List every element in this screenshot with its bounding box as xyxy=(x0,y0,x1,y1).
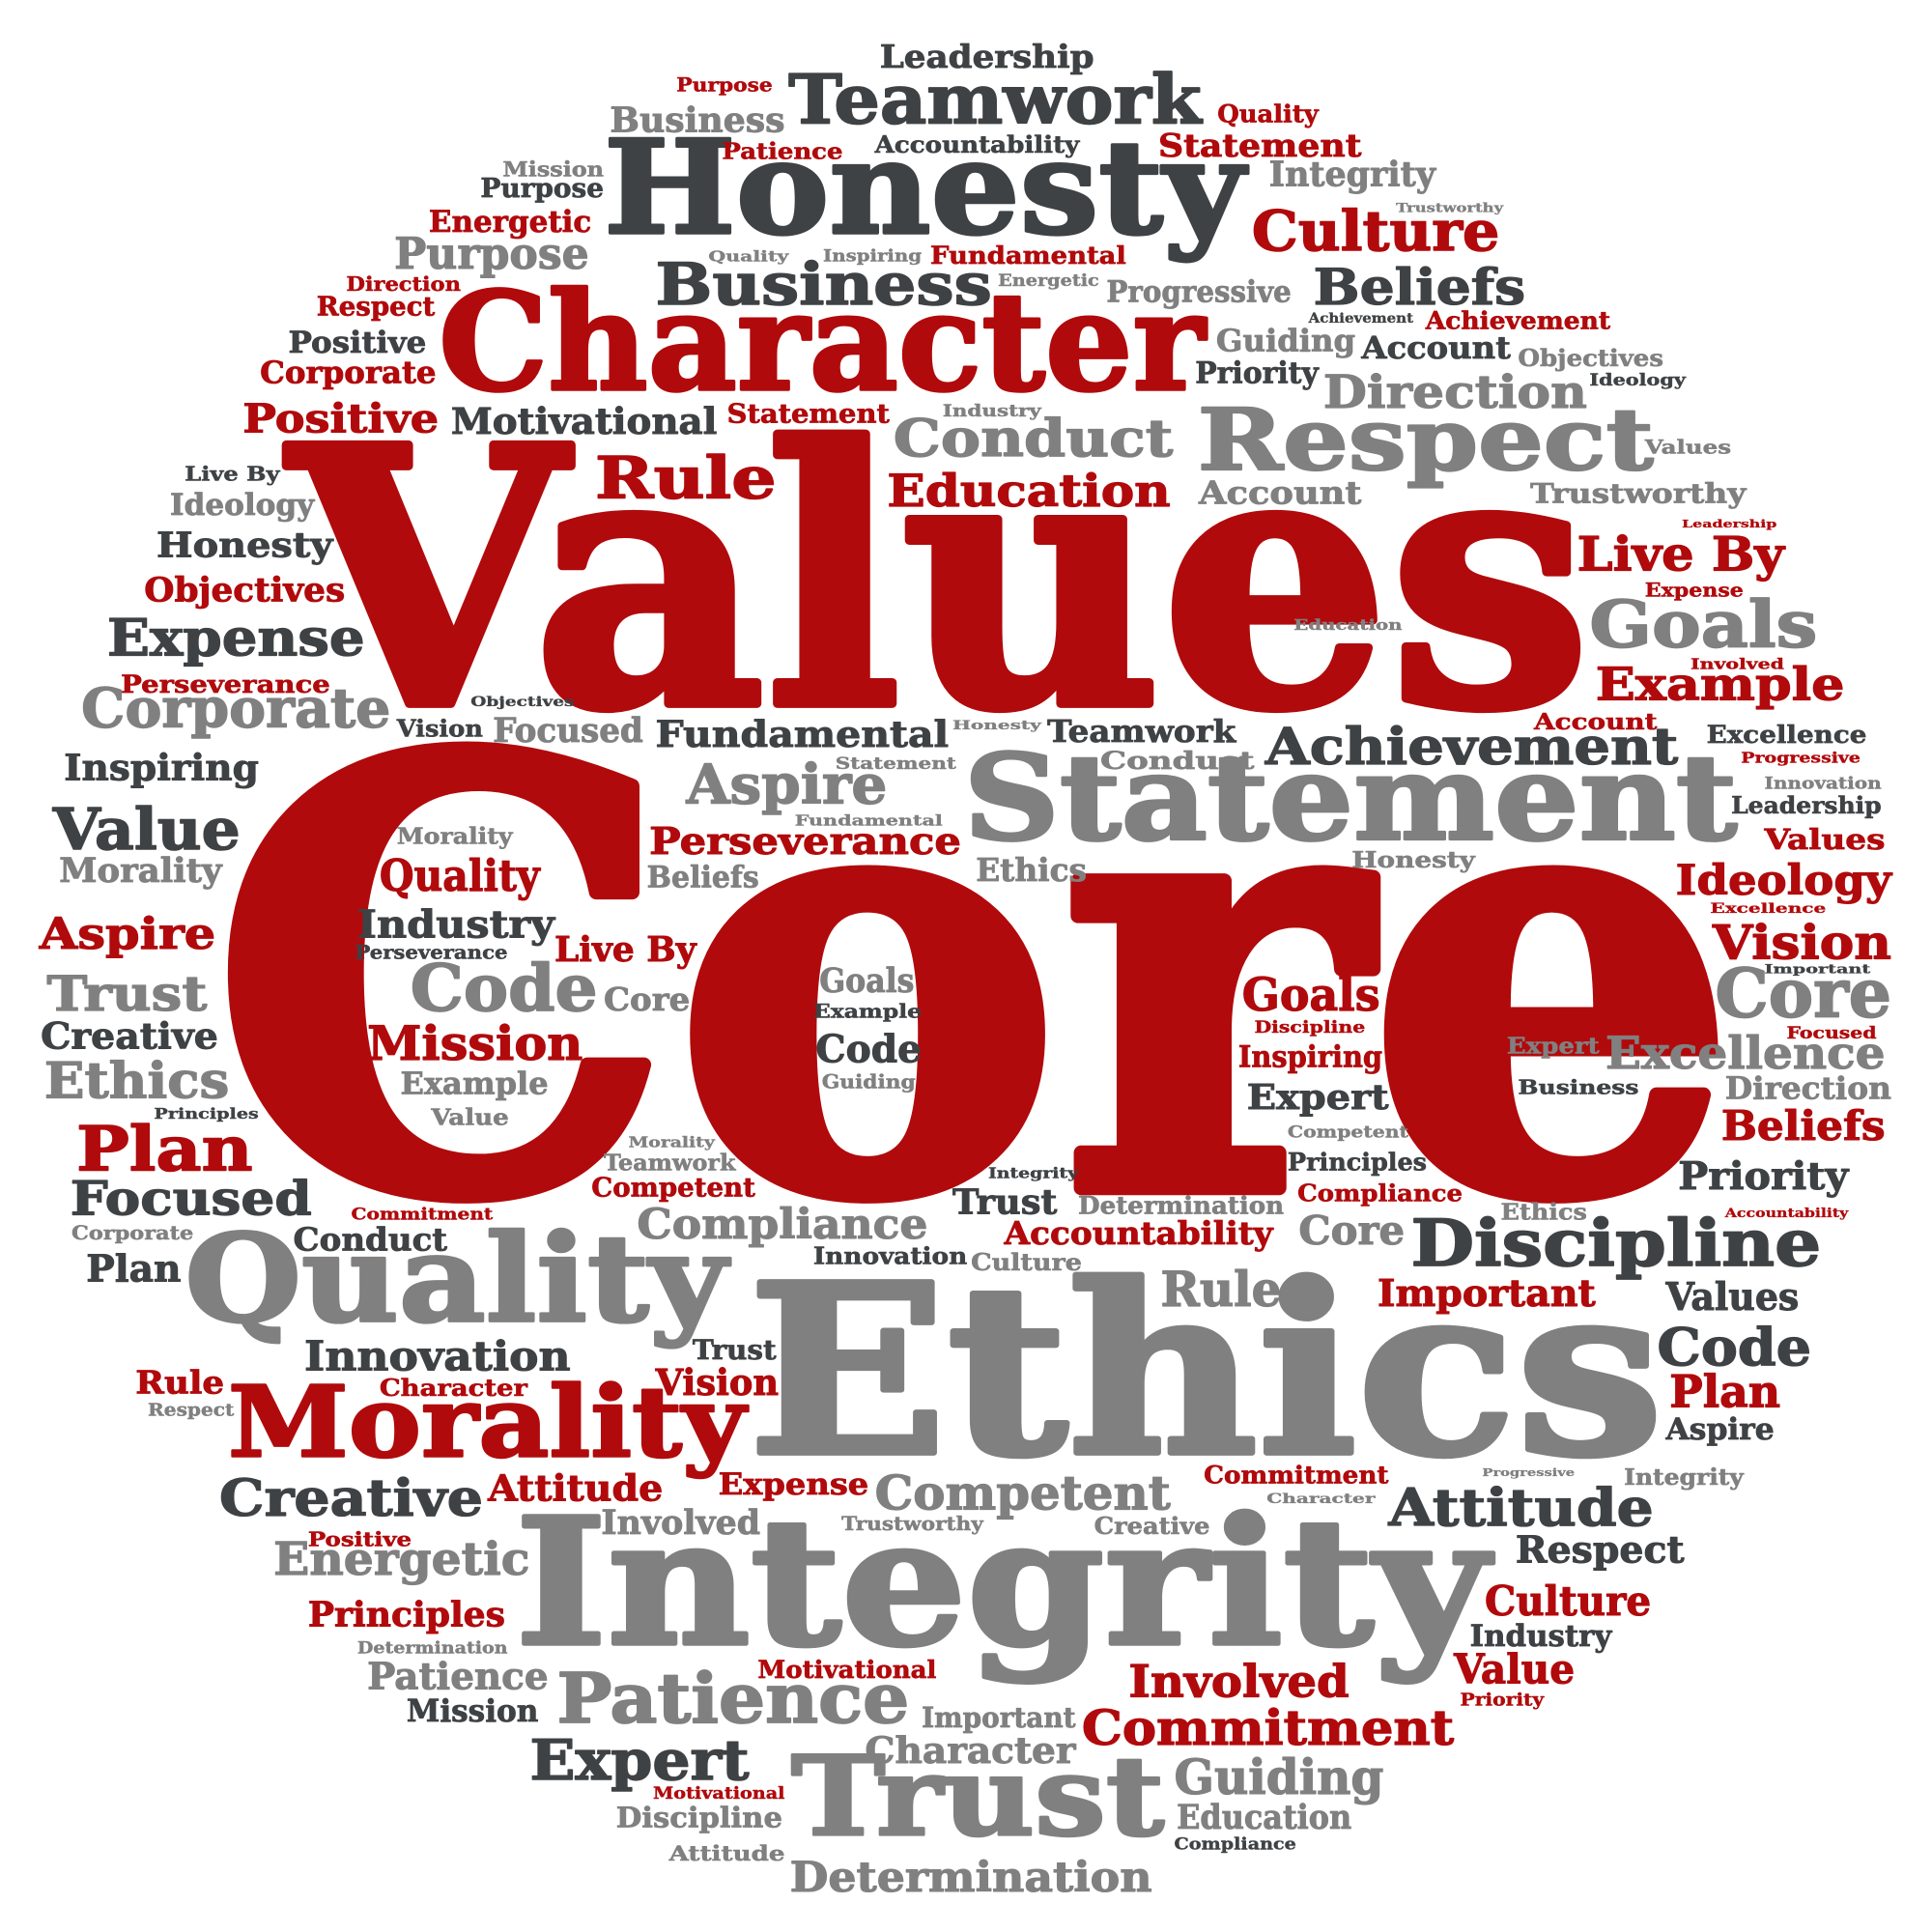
small words: upper middle section: Perseverance xyxy=(121,670,330,699)
small words: upper middle section: Ideology xyxy=(1676,856,1893,905)
small words: top section: Priority xyxy=(1195,356,1320,391)
small words: upper middle section: Account xyxy=(1533,709,1658,735)
small words: top section: Values xyxy=(1644,436,1731,458)
small words: top section: Energetic xyxy=(998,270,1099,290)
small words: upper middle section: Fundamental xyxy=(795,812,943,830)
small words: bottom section: Creative xyxy=(1094,1512,1210,1540)
small words: top section: Business xyxy=(610,99,784,140)
small words: upper middle section: Vision xyxy=(396,715,483,743)
small words: middle section: Inspiring xyxy=(1238,1040,1382,1075)
small words: upper middle section: Teamwork xyxy=(1047,713,1236,750)
word: Ethics: Ethics xyxy=(748,1234,1663,1509)
small words: top section: Objectives xyxy=(1518,344,1663,372)
small words: middle section: Teamwork xyxy=(604,1151,737,1177)
small words: bottom section: Respect xyxy=(1516,1528,1685,1572)
small words: lower middle section: Compliance xyxy=(637,1200,927,1249)
small words: lower middle section: Plan xyxy=(1669,1366,1780,1418)
small words: middle section: Core xyxy=(604,980,690,1018)
small words: lower middle section: Plan xyxy=(86,1248,182,1292)
small words: middle section: Code xyxy=(815,1027,922,1071)
small words: lower middle section: Attitude xyxy=(1387,1477,1654,1538)
small words: top section: Quality xyxy=(1217,99,1320,128)
small words: top section: Business xyxy=(656,251,992,319)
small words: lower middle section: Character xyxy=(1266,1492,1376,1507)
small words: lower middle section: Conduct xyxy=(294,1221,448,1259)
small words: upper middle section: Leadership xyxy=(1682,517,1776,530)
small words: middle section: Core xyxy=(1716,954,1891,1033)
small words: lower middle section xyxy=(71,1200,1849,1538)
word: Teamwork: Teamwork xyxy=(788,60,1203,140)
small words: lower middle section: Core xyxy=(1298,1208,1405,1254)
small words: upper middle section: Expense xyxy=(107,610,365,668)
small words: top section: Leadership xyxy=(880,38,1094,75)
small words: middle section: Beliefs xyxy=(1721,1101,1886,1150)
small words: bottom section: Education xyxy=(1177,1799,1351,1837)
small words: top section: Ideology xyxy=(1589,370,1688,389)
small words: bottom section: Motivational xyxy=(653,1783,784,1803)
small words: bottom section: Commitment xyxy=(1082,1699,1454,1756)
small words: upper middle section xyxy=(52,517,1893,905)
small words: lower middle section: Character xyxy=(380,1374,528,1402)
small words: lower middle section: Innovation xyxy=(813,1242,968,1270)
small words: middle section: Plan xyxy=(76,1114,252,1186)
small words: upper middle section: Statement xyxy=(836,753,956,773)
small words: bottom section: Value xyxy=(1453,1644,1575,1692)
word: Integrity: Integrity xyxy=(515,1480,1493,1686)
small words: upper middle section: Example xyxy=(1596,658,1844,711)
small words: middle section: Goals xyxy=(819,962,914,1001)
small words: lower middle section: Code xyxy=(1658,1317,1811,1378)
small words: lower middle section: Commitment xyxy=(1204,1462,1389,1491)
small words: top section: Mission xyxy=(502,157,604,182)
small words: middle section: Industry xyxy=(357,903,555,948)
small words: upper middle section: Honesty xyxy=(952,719,1042,733)
small words: bottom section: Determination xyxy=(357,1638,508,1658)
small words: lower middle section: Innovation xyxy=(304,1331,571,1379)
small words: upper middle section: Ethics xyxy=(976,851,1087,889)
word: Core: Core xyxy=(211,634,1737,1328)
small words: middle section: Excellence xyxy=(1710,901,1826,917)
small words: bottom section: Expert xyxy=(529,1727,750,1793)
small words: lower middle section: Respect xyxy=(148,1401,235,1421)
small words: top section: Education xyxy=(887,465,1171,517)
small words: lower middle section: Rule xyxy=(1161,1261,1282,1318)
small words: middle section: Ethics xyxy=(44,1052,229,1110)
small words: top section: Positive xyxy=(242,396,439,442)
small words: middle section: Creative xyxy=(41,1014,218,1057)
small words: top section: Direction xyxy=(346,272,461,296)
small words: lower middle section: Expense xyxy=(719,1467,868,1502)
small words: top section: Account xyxy=(1198,474,1362,512)
small words: bottom section: Energetic xyxy=(273,1533,529,1586)
small words: middle section: Business xyxy=(1518,1076,1638,1099)
word: Quality: Quality xyxy=(185,1208,730,1350)
small words: middle section: Trust xyxy=(952,1181,1058,1222)
small words: lower middle section: Vision xyxy=(655,1361,779,1404)
small words: bottom section: Patience xyxy=(367,1656,549,1699)
small words: middle section: Expert xyxy=(1507,1034,1600,1060)
word: Statement: Statement xyxy=(963,728,1737,867)
small words: lower middle section: Discipline xyxy=(1410,1206,1821,1281)
small words: upper middle section: Value xyxy=(52,796,241,863)
small words: lower middle section: Corporate xyxy=(71,1222,193,1244)
small words: bottom section: Determination xyxy=(790,1853,1152,1902)
small words: top section: Achievement xyxy=(1425,307,1610,336)
small words: middle section: Principles xyxy=(1288,1149,1427,1178)
small words: bottom section: Patience xyxy=(557,1658,909,1739)
small words: lower middle section: Creative xyxy=(219,1469,483,1528)
small words: upper middle section: Expense xyxy=(1645,579,1744,601)
small words: lower middle section: Values xyxy=(1665,1275,1799,1320)
small words: lower middle section: Important xyxy=(1378,1272,1596,1316)
small words: top section: Purpose xyxy=(676,73,773,96)
small words: upper middle section: Conduct xyxy=(1100,747,1255,776)
small words: top section: Rule xyxy=(595,444,777,512)
word: Trust: Trust xyxy=(791,1731,1164,1861)
small words: upper middle section: Honesty xyxy=(1351,847,1476,873)
small words: middle section: Competent xyxy=(591,1174,756,1204)
small words: upper middle section: Achievement xyxy=(1264,718,1678,777)
small words: middle section: Goals xyxy=(1242,969,1380,1022)
small words: middle section: Integrity xyxy=(988,1164,1079,1181)
small words: upper middle section: Education xyxy=(1293,616,1403,634)
small words: top section xyxy=(170,38,1747,523)
small words: bottom section: Industry xyxy=(1470,1619,1613,1654)
small words: upper middle section: Focused xyxy=(493,712,643,751)
small words: top section: Culture xyxy=(1252,198,1499,264)
small words: top section: Inspiring xyxy=(823,245,923,265)
small words: middle section: Example xyxy=(401,1065,549,1102)
small words: bottom section: Mission xyxy=(407,1692,538,1729)
small words: upper middle section: Progressive xyxy=(1741,750,1861,767)
small words: middle section: Discipline xyxy=(1254,1017,1365,1037)
small words: upper middle section: Objectives xyxy=(470,695,575,710)
small words: middle section: Guiding xyxy=(822,1070,916,1093)
small words: middle section: Trust xyxy=(46,965,207,1022)
small words: top section: Ideology xyxy=(170,488,315,523)
small words: lower middle section: Accountability xyxy=(1004,1214,1274,1252)
small words: middle section: Priority xyxy=(1678,1154,1849,1199)
small words: top section: Account xyxy=(1360,329,1511,366)
small words: top section: Statement xyxy=(727,399,891,429)
small words: upper middle section: Objectives xyxy=(144,571,345,610)
small words: middle section: Mission xyxy=(367,1016,582,1071)
small words: upper middle section: Excellence xyxy=(1707,721,1866,750)
small words: top section: Positive xyxy=(288,326,426,360)
small words: upper middle section: Perseverance xyxy=(649,820,961,864)
small words: upper middle section: Quality xyxy=(380,850,541,901)
small words: lower middle section: Progressive xyxy=(1482,1465,1575,1479)
word: Character: Character xyxy=(439,263,1208,422)
small words: bottom section: Involved xyxy=(1128,1655,1350,1707)
small words: bottom section: Culture xyxy=(1485,1577,1651,1625)
small words: lower middle section: Rule xyxy=(135,1364,224,1402)
small words: middle section: Focused xyxy=(1786,1023,1877,1042)
small words: upper middle section: Aspire xyxy=(685,753,887,817)
small words: upper middle section: Honesty xyxy=(156,526,334,566)
small words: upper middle section: Values xyxy=(1763,822,1886,856)
small words: top section: Live By xyxy=(185,462,281,485)
small words: middle section: Example xyxy=(813,1001,922,1023)
small words: bottom section: Guiding xyxy=(1175,1748,1383,1805)
small words: lower middle section: Trust xyxy=(693,1334,777,1366)
small words: middle section: Principles xyxy=(154,1105,259,1122)
small words: middle section: Expert xyxy=(1247,1077,1389,1118)
word: Values: Values xyxy=(283,370,1591,787)
small words: middle section: Vision xyxy=(1712,915,1891,970)
small words: bottom section: Involved xyxy=(601,1504,760,1543)
small words: bottom section xyxy=(273,1504,1685,1902)
small words: top section: Integrity xyxy=(1269,155,1436,195)
small words: middle section: Live By xyxy=(554,929,697,970)
small words: bottom section: Motivational xyxy=(757,1656,937,1685)
small words: bottom section: Positive xyxy=(308,1528,412,1551)
small words: top section: Conduct xyxy=(894,408,1174,469)
small words: top section: Trustworthy xyxy=(1530,477,1747,509)
small words: lower middle section: Ethics xyxy=(1501,1200,1587,1226)
small words: top section: Statement xyxy=(1158,127,1362,164)
small words: middle section: Excellence xyxy=(1605,1027,1886,1079)
small words: top section: Corporate xyxy=(260,355,437,391)
small words: top section: Trustworthy xyxy=(1396,201,1504,215)
word: Honesty: Honesty xyxy=(604,111,1249,264)
small words: top section: Progressive xyxy=(1106,274,1292,309)
small words: middle section: Direction xyxy=(1725,1070,1891,1107)
small words: top section: Motivational xyxy=(451,400,717,442)
small words: middle section: Code xyxy=(411,951,598,1026)
small words: top section: Industry xyxy=(943,401,1043,420)
small words: bottom section: Principles xyxy=(308,1595,505,1635)
small words: top section: Fundamental xyxy=(930,242,1126,270)
small words: top section: Respect xyxy=(317,293,436,323)
word: Morality: Morality xyxy=(228,1365,748,1480)
small words: upper middle section: Inspiring xyxy=(64,746,259,788)
small words: upper middle section: Morality xyxy=(397,824,513,850)
small words: bottom section: Important xyxy=(922,1700,1076,1734)
small words: top section: Beliefs xyxy=(1314,259,1525,317)
small words: middle section: Value xyxy=(430,1105,509,1131)
small words: middle section: Important xyxy=(1765,963,1870,978)
small words: lower middle section: Attitude xyxy=(487,1467,663,1510)
small words: lower middle section: Accountability xyxy=(1723,1207,1849,1221)
small words: top section: Accountability xyxy=(874,130,1080,158)
small words: bottom section: Character xyxy=(865,1729,1076,1772)
small words: lower middle section: Competent xyxy=(875,1465,1171,1520)
small words: middle section: Focused xyxy=(71,1172,312,1227)
small words: top section: Achievement xyxy=(1308,311,1414,327)
small words: lower middle section: Integrity xyxy=(1624,1464,1745,1491)
small words: top section: Energetic xyxy=(429,205,591,240)
small words: middle section: Morality xyxy=(629,1133,716,1151)
small words: bottom section: Compliance xyxy=(1175,1834,1296,1854)
small words: bottom section: Discipline xyxy=(616,1801,782,1834)
small words: top section: Patience xyxy=(722,139,842,165)
word: Respect: Respect xyxy=(1198,389,1654,490)
small words: lower middle section: Culture xyxy=(971,1248,1082,1276)
small words: upper middle section: Morality xyxy=(59,852,223,891)
small words: upper middle section: Leadership xyxy=(1731,791,1882,819)
small words: middle section: Determination xyxy=(1078,1191,1284,1220)
small words: middle section: Perseverance xyxy=(355,941,508,963)
small words: bottom section: Trustworthy xyxy=(841,1513,984,1535)
small words: middle section xyxy=(39,901,1891,1227)
small words: bottom section: Priority xyxy=(1460,1690,1545,1710)
small words: upper middle section: Corporate xyxy=(81,677,390,741)
small words: top section: Guiding xyxy=(1216,323,1355,359)
small words: top section: Purpose xyxy=(480,174,604,204)
small words: middle section: Competent xyxy=(1288,1122,1408,1141)
small words: top section: Purpose xyxy=(394,228,589,279)
small words: upper middle section: Involved xyxy=(1690,656,1784,673)
small words: lower middle section: Commitment xyxy=(352,1205,494,1224)
small words: upper middle section: Goals xyxy=(1589,587,1817,663)
small words: bottom section: Attitude xyxy=(668,1842,784,1866)
small words: top section: Direction xyxy=(1323,366,1587,419)
small words: middle section: Aspire xyxy=(39,908,215,959)
small words: middle section: Compliance xyxy=(1297,1179,1463,1208)
small words: lower middle section: Aspire xyxy=(1664,1412,1775,1447)
small words: upper middle section: Live By xyxy=(1577,527,1786,582)
small words: upper middle section: Fundamental xyxy=(656,713,949,755)
small words: upper middle section: Beliefs xyxy=(647,860,759,895)
small words: upper middle section: Innovation xyxy=(1765,773,1882,792)
small words: top section: Quality xyxy=(708,247,790,265)
